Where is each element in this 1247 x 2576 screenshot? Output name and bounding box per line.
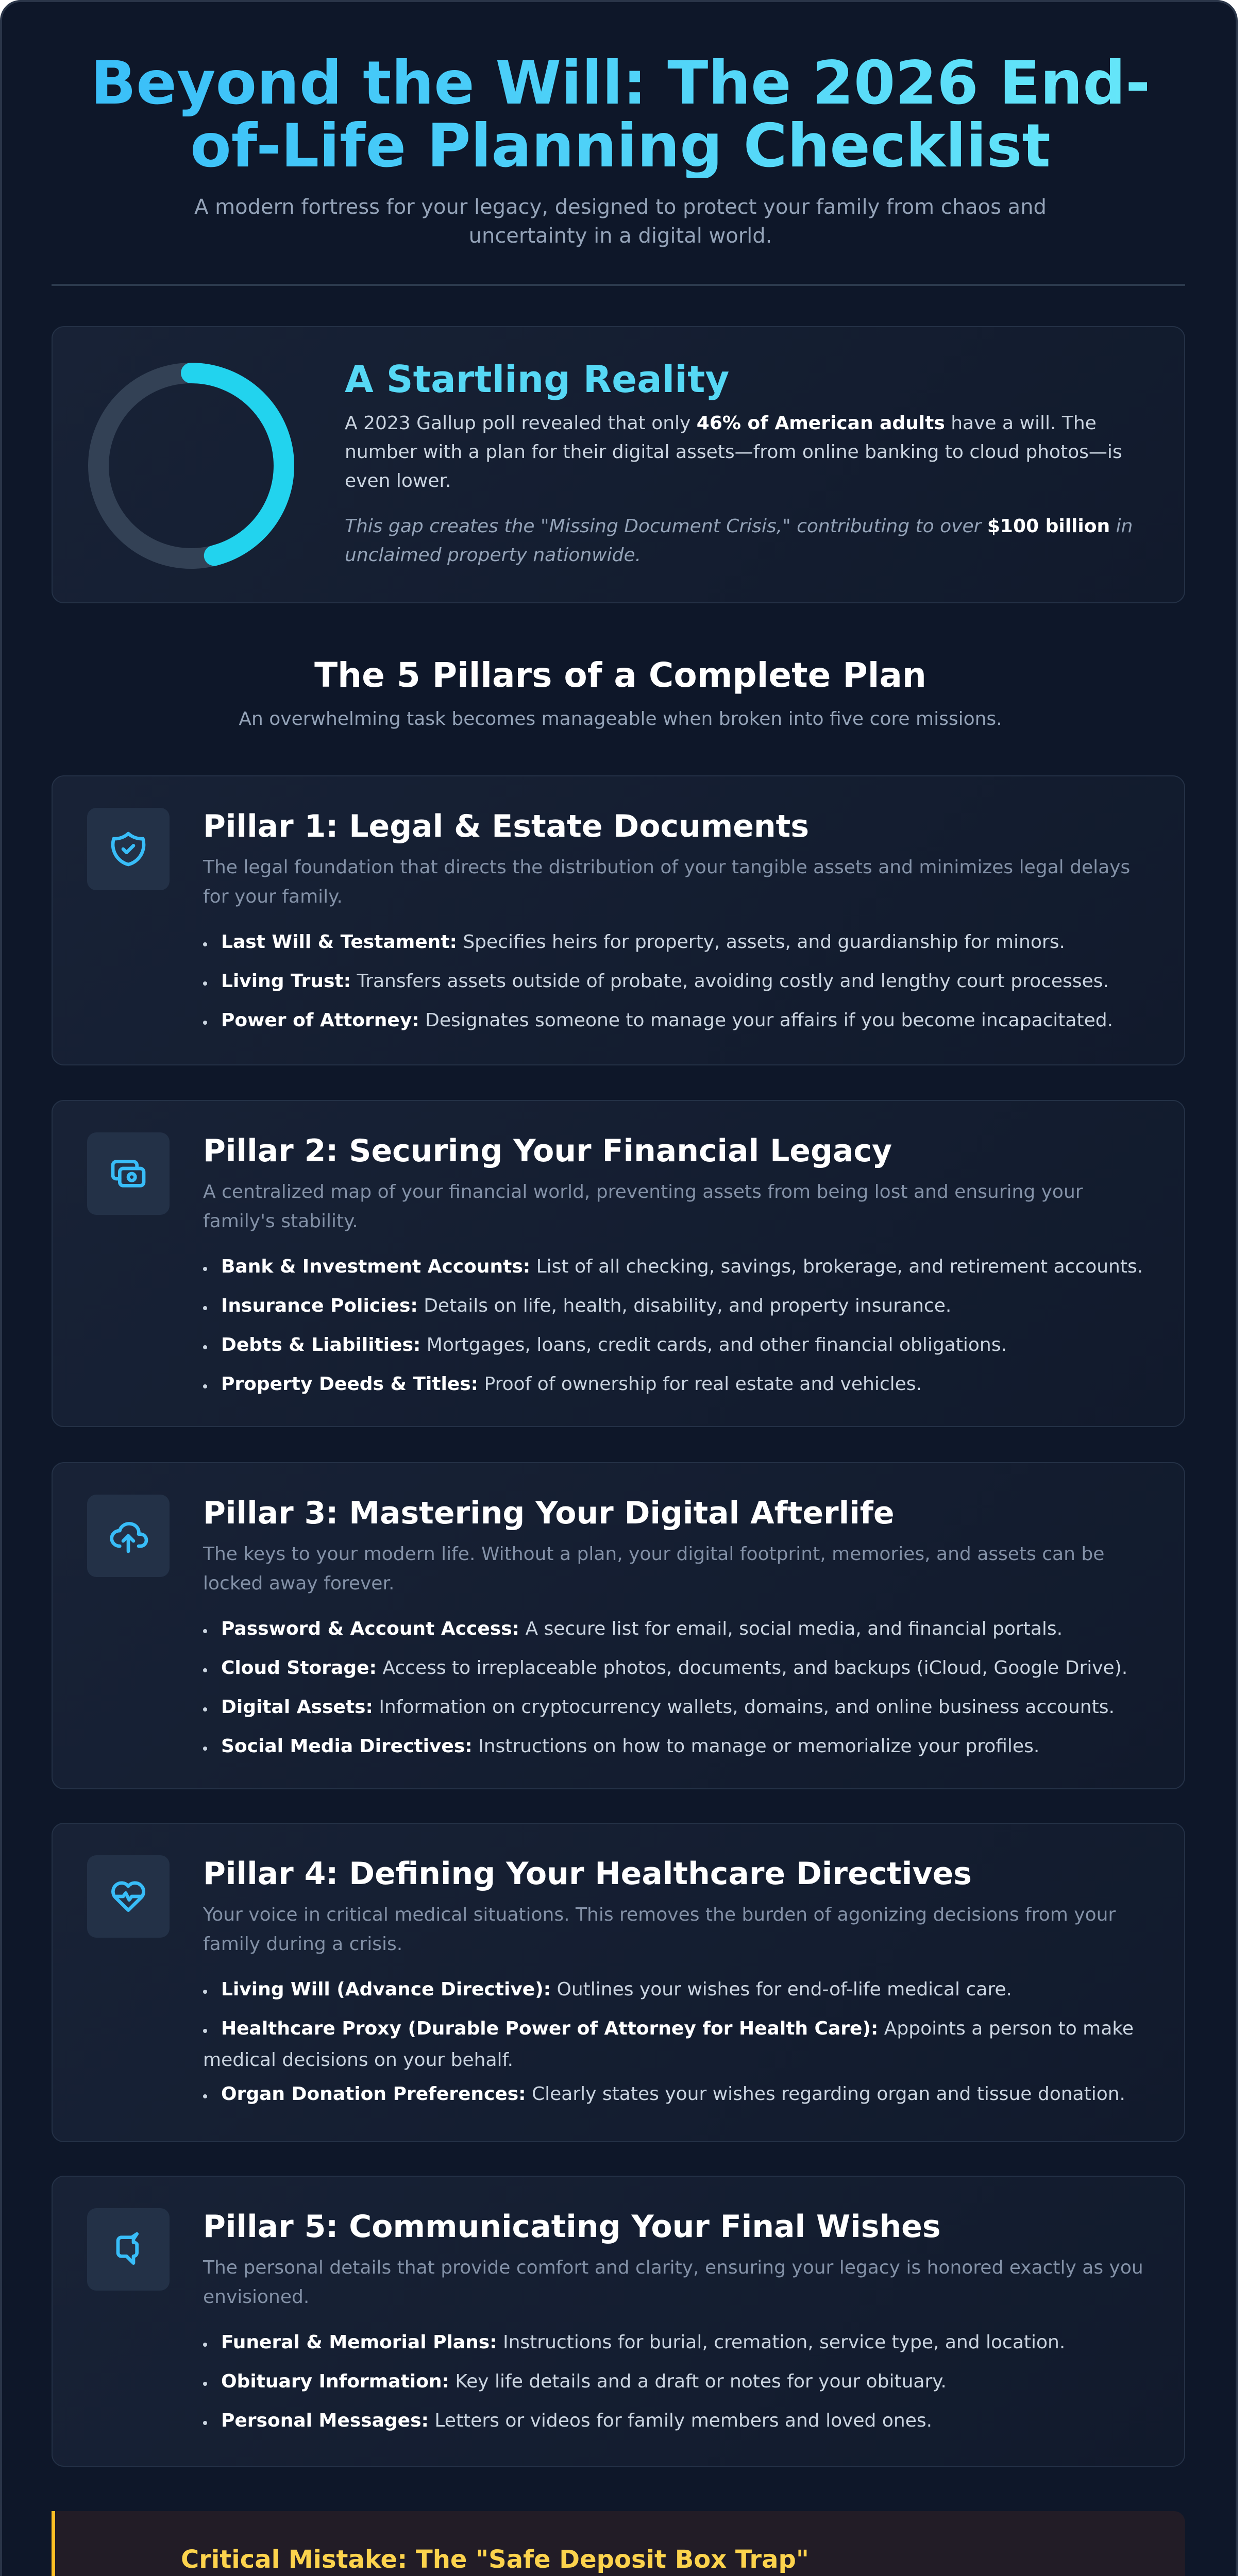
panel: pillar 2: A centralized map of your financial world, preventing assets from being lost and ensuring your family's stability.	[203, 1181, 1083, 1232]
panel: startling reality	[52, 326, 1185, 603]
icon: warning triangle	[94, 2575, 156, 2576]
section heading: The 5 Pillars of a Complete Plan	[314, 655, 926, 695]
reality text	[345, 358, 1133, 566]
panel: pillar 2: Property Deeds & Titles: Proof of ownership for real estate and vehicles.	[221, 1374, 922, 1395]
panel: pillar 1	[52, 775, 1185, 1065]
title: Beyond the Will: The 2026 End-of-Life Planning Checklist	[91, 48, 1150, 181]
section subheading: An overwhelming task becomes manageable when broken into five core missions.	[239, 708, 1002, 730]
panel: pillar 4: Your voice in critical medical situations. This removes the burden of agonizing decisions from your family during a crisis.	[203, 1904, 1116, 1955]
icon: cloud upload	[87, 1495, 170, 1577]
panel: pillar 1: The legal foundation that directs the distribution of your tangible assets and minimizes legal delays for your family.	[203, 857, 1130, 907]
icon: cash	[87, 1132, 170, 1215]
panel: pillar 2: Insurance Policies: Details on life, health, disability, and property insurance.	[221, 1295, 951, 1316]
panel: pillar 4: Living Will (Advance Directive): Outlines your wishes for end-of-life medical care.	[221, 1979, 1012, 2000]
panel: pillar 5	[52, 2176, 1185, 2467]
panel: pillar 3: Pillar 3: Mastering Your Digital Afterlife	[203, 1495, 895, 1531]
panel: pillar 2	[52, 1100, 1185, 1427]
panel: pillar 2: Pillar 2: Securing Your Financial Legacy	[203, 1133, 892, 1169]
heading: A Startling Reality	[345, 358, 729, 401]
panel: pillar 4	[52, 1823, 1185, 2142]
callout: safe deposit box warning	[52, 2511, 1185, 2576]
panel: pillar 5: The personal details that provide comfort and clarity, ensuring your legacy is honored exactly as you envisioned.	[203, 2257, 1143, 2308]
panel: pillar 2: Debts & Liabilities: Mortgages, loans, credit cards, and other financial obligations.	[221, 1334, 1007, 1355]
panel: pillar 3: The keys to your modern life. Without a plan, your digital footprint, memories, and assets can be locked away forever.	[203, 1544, 1104, 1594]
italic note: This gap creates the "Missing Document Crisis," contributing to over $100 billion in unclaimed property nationwide.	[345, 516, 1133, 566]
panel: pillar 4: Pillar 4: Defining Your Healthcare Directives	[203, 1856, 972, 1892]
panel: pillar 4: Organ Donation Preferences: Clearly states your wishes regarding organ and tissue donation.	[221, 2083, 1125, 2105]
panel: pillar 1: Power of Attorney: Designates someone to manage your affairs if you become incapacitated.	[221, 1010, 1113, 1031]
body: A 2023 Gallup poll revealed that only 46% of American adults have a will. The number with a plan for their digital assets—from online banking to cloud photos—is even lower.	[345, 413, 1122, 492]
panel: pillar 3: Digital Assets: Information on cryptocurrency wallets, domains, and online business accounts.	[221, 1697, 1115, 1718]
panel: pillar 1: Last Will & Testament: Specifies heirs for property, assets, and guardianship for minors.	[221, 931, 1065, 953]
panel: pillar 3	[52, 1462, 1185, 1789]
warning text: Critical Mistake: The "Safe Deposit Box Trap"	[181, 2545, 809, 2574]
icon: shield check	[87, 808, 170, 890]
panel: pillar 5: Funeral & Memorial Plans: Instructions for burial, cremation, service type, and location.	[221, 2332, 1065, 2353]
subtitle: A modern fortress for your legacy, designed to protect your family from chaos and uncertainty in a digital world.	[194, 195, 1047, 248]
icon: message	[87, 2208, 170, 2291]
panel: pillar 1: Living Trust: Transfers assets outside of probate, avoiding costly and lengthy court processes.	[221, 971, 1109, 992]
panel: pillar 3: Cloud Storage: Access to irreplaceable photos, documents, and backups (iCloud, Google Drive).	[221, 1657, 1127, 1679]
panel: pillar 5: Personal Messages: Letters or videos for family members and loved ones.	[221, 2410, 932, 2431]
panel: pillar 1: Pillar 1: Legal & Estate Documents	[203, 808, 809, 844]
panel: pillar 3: Password & Account Access: A secure list for email, social media, and financial portals.	[221, 1618, 1063, 1639]
panel: pillar 5: Pillar 5: Communicating Your Final Wishes	[203, 2209, 941, 2245]
panel: pillar 2: Bank & Investment Accounts: List of all checking, savings, brokerage, and retirement accounts.	[221, 1256, 1143, 1277]
donut chart 46%	[88, 363, 294, 569]
icon: heart pulse	[87, 1855, 170, 1938]
panel: pillar 5: Obituary Information: Key life details and a draft or notes for your obituary.	[221, 2371, 947, 2392]
panel: pillar 4: Healthcare Proxy (Durable Power of Attorney for Health Care): Appoints a person to make medical decisions on your behalf.	[203, 2018, 1134, 2071]
panel: pillar 3: Social Media Directives: Instructions on how to manage or memorialize your profiles.	[221, 1736, 1039, 1757]
